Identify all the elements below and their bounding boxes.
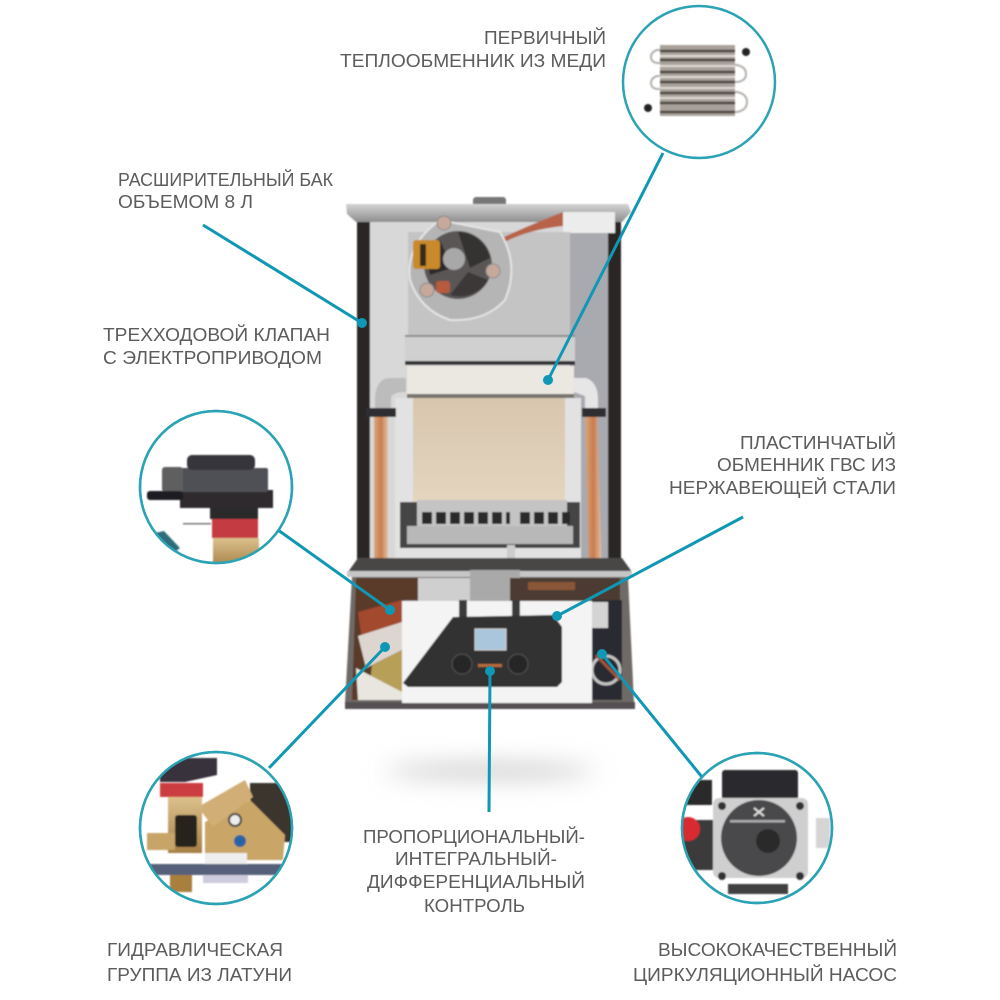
display xyxy=(475,629,506,650)
label: PID control xyxy=(363,826,585,916)
leader: plate heat exchanger xyxy=(552,517,743,621)
boiler upper casing xyxy=(346,197,631,570)
callout lines and anchor dots xyxy=(203,153,743,812)
label: hydraulic group: ГРУППА ИЗ ЛАТУНИ xyxy=(107,965,292,985)
copper pipes xyxy=(366,378,606,572)
boiler lower section xyxy=(345,558,635,709)
leader: circulation pump xyxy=(597,649,702,777)
boiler illustration xyxy=(345,197,635,709)
label: expansion tank: РАСШИРИТЕЛЬНЫЙ БАК xyxy=(118,169,334,190)
white front panel xyxy=(402,601,592,703)
infographic canvas xyxy=(103,4,896,985)
label: plate heat exchanger xyxy=(669,432,896,498)
label: circulation pump xyxy=(633,939,897,985)
label: plate heat exchanger: НЕРЖАВЕЮЩЕЙ СТАЛИ xyxy=(669,477,896,498)
leader: three-way valve xyxy=(278,530,395,615)
fan motor xyxy=(409,216,511,320)
fan plate xyxy=(405,212,575,363)
label: expansion tank: ОБЪЕМОМ 8 Л xyxy=(118,192,253,212)
wires and valve left xyxy=(358,600,402,640)
control knobs xyxy=(452,654,472,674)
control panel xyxy=(403,600,562,687)
leader: hydraulic group xyxy=(269,642,390,768)
primary heat exchanger xyxy=(405,361,575,398)
leader: primary heat exchanger xyxy=(543,153,663,385)
combustion chamber xyxy=(395,398,581,558)
label: PID control: ИНТЕГРАЛЬНЫЙ- xyxy=(395,848,557,869)
pump wires right xyxy=(592,600,622,700)
label: primary heat exchanger: ПЕРВИЧНЫЙ xyxy=(484,27,606,48)
leader: expansion tank xyxy=(203,225,367,328)
label: primary heat exchanger: ТЕПЛООБМЕННИК ИЗ МЕДИ xyxy=(340,51,606,71)
floor shadow under boiler xyxy=(385,764,595,778)
label: three-way valve: С ЭЛЕКТРОПРИВОДОМ xyxy=(103,348,322,368)
icon: brass hydraulic group circle xyxy=(140,752,295,904)
label: plate heat exchanger: ПЛАСТИНЧАТЫЙ xyxy=(740,432,896,453)
label: circulation pump: ВЫСОКОКАЧЕСТВЕННЫЙ xyxy=(658,939,897,960)
label: hydraulic group: ГИДРАВЛИЧЕСКАЯ xyxy=(107,940,283,960)
burner xyxy=(400,500,580,565)
label: three-way valve xyxy=(103,324,330,368)
label: PID control: ДИФФЕРЕНЦИАЛЬНЫЙ xyxy=(367,871,585,892)
label: circulation pump: ЦИРКУЛЯЦИОННЫЙ НАСОС xyxy=(633,964,897,985)
label: expansion tank xyxy=(118,169,334,212)
icon: copper heat exchanger circle xyxy=(623,6,775,158)
icon: circulation pump circle xyxy=(676,753,832,903)
label: hydraulic group xyxy=(107,940,292,985)
label: three-way valve: ТРЕХХОДОВОЙ КЛАПАН xyxy=(103,324,330,345)
leader: PID control xyxy=(485,666,495,812)
icon: three-way valve circle xyxy=(140,411,292,568)
label: PID control: КОНТРОЛЬ xyxy=(424,896,525,916)
label: PID control: ПРОПОРЦИОНАЛЬНЫЙ- xyxy=(363,826,585,847)
label: plate heat exchanger: ОБМЕННИК ГВС ИЗ xyxy=(717,455,896,475)
label: primary heat exchanger xyxy=(340,27,606,71)
